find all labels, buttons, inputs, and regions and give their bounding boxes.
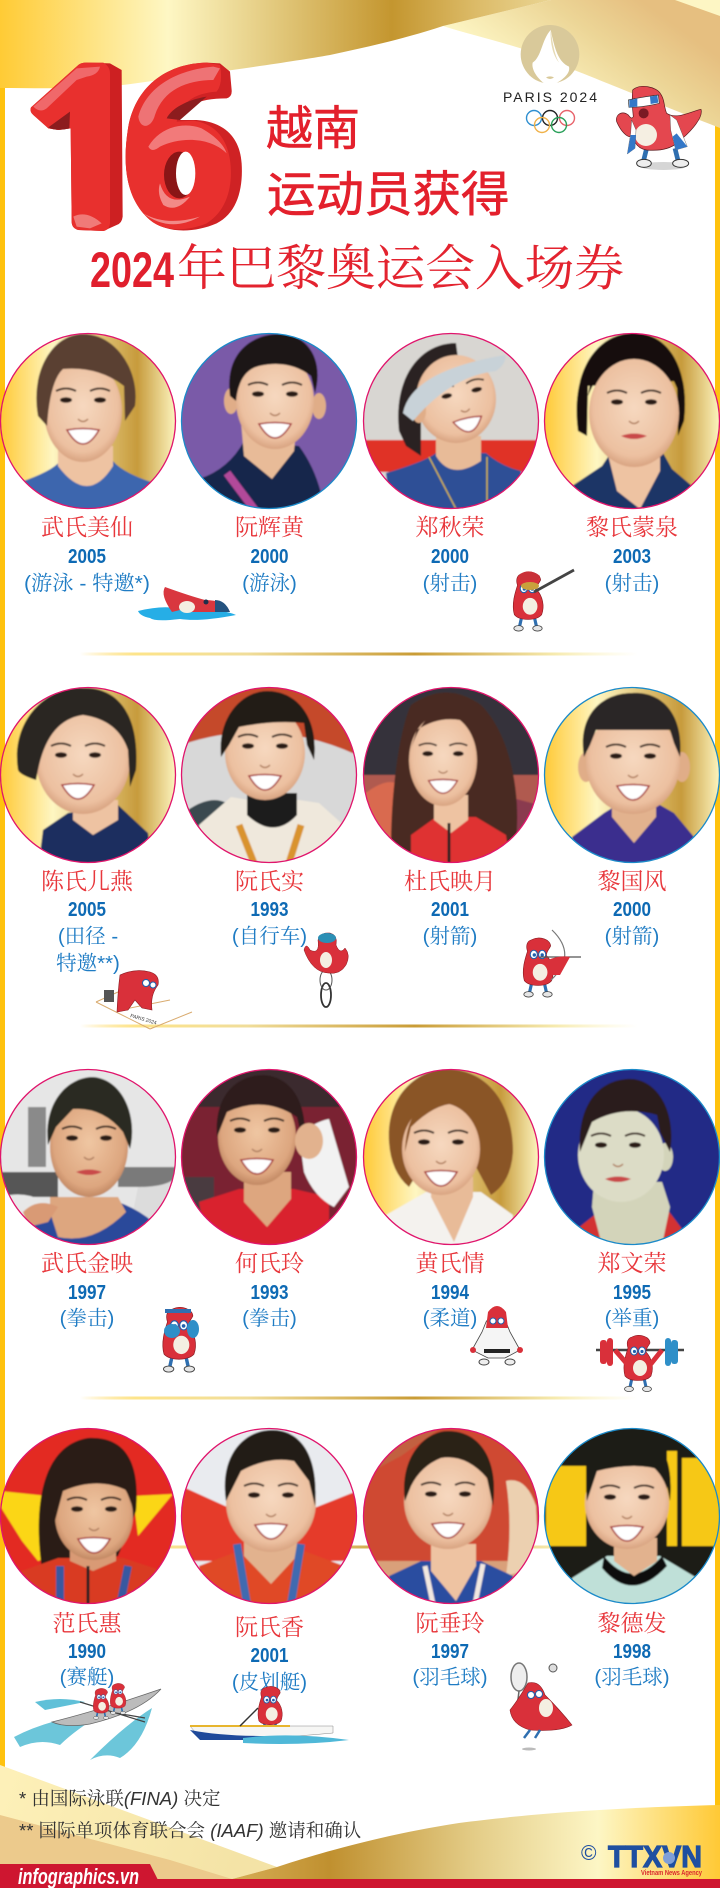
birth year: 2000: [613, 899, 651, 921]
portrait: [544, 1428, 720, 1611]
icon: canoe mascot: [190, 1686, 349, 1744]
footer gold ribbon: [0, 1765, 720, 1879]
birth year: 2000: [431, 546, 469, 568]
icon: judo mascot: [470, 1306, 523, 1365]
icon: shooter mascot: [513, 570, 574, 631]
sport: (赛艇): [60, 1666, 114, 1689]
portrait: [0, 1428, 176, 1611]
name: 范氏惠: [52, 1611, 122, 1636]
name: 郑文荣: [598, 1251, 666, 1276]
name: 黄氏情: [416, 1251, 484, 1276]
sport: (柔道): [423, 1307, 477, 1330]
portrait: [363, 687, 539, 870]
name: 武氏美仙: [41, 515, 133, 540]
birth year: 2005: [68, 546, 106, 568]
sport: (射箭): [605, 925, 659, 948]
portrait: [181, 1428, 357, 1611]
portrait: [181, 1069, 357, 1252]
sport: (射击): [423, 572, 477, 595]
birth year: 1990: [68, 1641, 106, 1663]
birth year: 1994: [431, 1282, 470, 1304]
footnote 1: * 由国际泳联(FINA) 决定: [19, 1788, 220, 1809]
footnote 2: ** 国际单项体育联合会 (IAAF) 邀请和确认: [19, 1820, 361, 1841]
icon: flame face emblem: [521, 25, 579, 84]
name: 黎国风: [598, 869, 666, 894]
icon: boxing mascot: [163, 1307, 199, 1372]
birth year: 1993: [250, 1282, 288, 1304]
title: 2024年巴黎奥运会入场券: 年巴黎奥运会入场券: [177, 241, 624, 296]
sport: (游泳): [242, 572, 297, 595]
birth year: 2001: [431, 899, 469, 921]
portrait: [544, 1069, 720, 1252]
panel: athlete 武氏美仙: [0, 333, 176, 595]
portrait: [544, 687, 720, 870]
portrait: [363, 1069, 539, 1252]
icon: badminton mascot: [510, 1663, 572, 1750]
TTXVN logo: Vietnam News Agency: [641, 1870, 702, 1877]
sport: (拳击): [242, 1307, 297, 1330]
portrait: [363, 333, 539, 516]
portrait: [544, 333, 720, 516]
sport: [56, 925, 120, 975]
panel: athlete 黎德发: [544, 1428, 720, 1689]
sport: (羽毛球): [594, 1666, 670, 1689]
panel: athlete 何氏玲: [181, 1069, 357, 1330]
name: 阮氏香: [235, 1615, 304, 1640]
name: 陈氏儿燕: [41, 869, 134, 894]
title: 越南: 越南: [266, 102, 360, 155]
portrait: [0, 687, 176, 870]
sport: (举重): [605, 1307, 659, 1330]
icon: sprint start mascot: PARIS 2024: [129, 1013, 157, 1026]
sport: (皮划艇): [232, 1671, 307, 1694]
TTXVN logo: TTXVN: [608, 1839, 702, 1874]
digit 6: [126, 63, 242, 230]
sport: 特邀**): [56, 952, 120, 975]
panel: athlete 杜氏映月: [363, 687, 539, 948]
name: 阮氏实: [235, 869, 304, 894]
icon: weightlifting mascot: [596, 1335, 684, 1392]
name: 黎德发: [598, 1611, 666, 1636]
panel: athlete 郑文荣: [544, 1069, 720, 1330]
TTXVN logo: ©: [581, 1842, 597, 1865]
name: 黎氏蒙泉: [586, 515, 678, 540]
title: 运动员获得: 运动员获得: [267, 168, 510, 222]
portrait: [0, 1069, 176, 1252]
panel: athlete 阮氏实: [181, 687, 357, 948]
sport: (拳击): [60, 1307, 114, 1330]
birth year: 2003: [613, 546, 651, 568]
sport: (田径 -: [58, 925, 118, 948]
panel: athlete 阮辉黄: [181, 333, 357, 595]
portrait: [363, 1428, 539, 1611]
name: 武氏金映: [41, 1251, 133, 1276]
panel: athlete 阮氏香: [181, 1428, 357, 1694]
TTXVN logo: [581, 1839, 702, 1877]
birth year: 2005: [68, 899, 106, 921]
sport: (自行车): [232, 925, 307, 948]
name: 何氏玲: [235, 1251, 304, 1276]
portrait: [0, 333, 176, 516]
icon: cycling mascot: [304, 933, 348, 1007]
sport: (游泳 - 特邀*): [24, 572, 150, 595]
portrait: [181, 333, 357, 516]
Paris 2024 logo: [503, 25, 597, 133]
birth year: 2000: [250, 546, 288, 568]
panel: athlete 陈氏儿燕: [0, 687, 176, 975]
panel: athlete 黄氏情: [363, 1069, 539, 1330]
birth year: 1995: [613, 1282, 651, 1304]
icon: sprint start mascot: [96, 971, 192, 1029]
birth year: 1997: [431, 1641, 469, 1663]
icon: header mascot with scarf: [616, 86, 701, 170]
name: 阮垂玲: [416, 1611, 484, 1636]
icon: rowing mascots: [14, 1683, 161, 1760]
panel: athlete 黎氏蒙泉: [544, 333, 720, 595]
big number 16: [31, 63, 242, 231]
sport: (射箭): [423, 925, 477, 948]
icon: olympic rings: [526, 110, 574, 132]
name: 郑秋荣: [416, 515, 484, 540]
panel: athlete 黎国风: [544, 687, 720, 948]
panel: athlete 阮垂玲: [363, 1428, 539, 1689]
panel: athlete 郑秋荣: [363, 333, 539, 595]
left gold side bar: [0, 85, 5, 1770]
top gold ribbon: [0, 0, 720, 128]
icon: archery mascot: [523, 930, 581, 997]
birth year: 1993: [250, 899, 288, 921]
portrait: [181, 687, 357, 870]
logo wordmark: PARIS 2024: [503, 89, 597, 105]
birth year: 1997: [68, 1282, 106, 1304]
right gold side bar: [715, 120, 720, 1810]
name: 杜氏映月: [404, 869, 496, 894]
panel: athlete 范氏惠: [0, 1428, 176, 1689]
title: 2024年巴黎奥运会入场券: 2024: [90, 242, 174, 298]
divider lines: [80, 652, 638, 656]
footer red bar: [0, 1879, 720, 1888]
birth year: 2001: [250, 1645, 288, 1667]
birth year: 1998: [613, 1641, 651, 1663]
sport: (射击): [605, 572, 659, 595]
panel: athlete 武氏金映: [0, 1069, 176, 1330]
icon: swimming mascot: [138, 587, 236, 620]
digit 1: [31, 63, 123, 231]
name: 阮辉黄: [235, 515, 305, 540]
sport: (羽毛球): [412, 1666, 488, 1689]
